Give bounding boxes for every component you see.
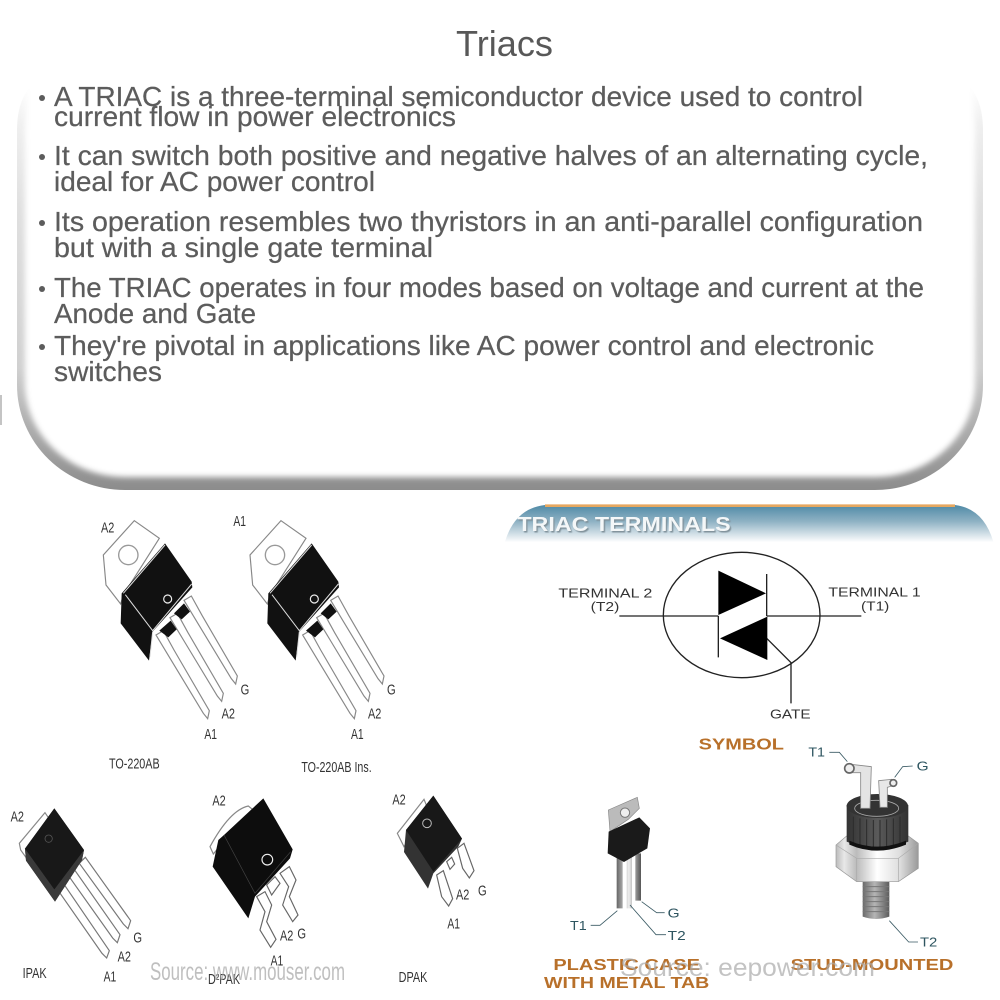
triac symbol — [558, 552, 921, 721]
source credit: eepower: Source: eepower.com — [620, 954, 875, 982]
panel: triac terminals — [505, 505, 993, 992]
icon: D2PAK package: D²PAK — [208, 972, 240, 988]
icon: TO-220AB package: A1 — [204, 727, 217, 743]
bullet 1: A TRIAC is a three-terminal semiconductor device used to control — [54, 81, 863, 112]
bullet 5: switches — [54, 356, 162, 387]
title: Triacs — [456, 23, 553, 64]
bullet list — [39, 81, 928, 387]
header banner: TRIAC TERMINALS — [519, 515, 732, 538]
icon: plastic case triac: T1 — [570, 919, 587, 933]
icon: stud-mounted triac: T2 — [920, 936, 937, 950]
icon: D2PAK package — [208, 793, 306, 988]
panel: text card — [0, 60, 983, 490]
triac symbol: TERMINAL 2 — [558, 585, 652, 600]
icon: TO-220AB Ins. package: A2 — [368, 706, 381, 722]
bullet 4: Anode and Gate — [54, 298, 256, 329]
icon: TO-220AB Ins. package: G — [387, 683, 396, 699]
icon: DPAK package — [392, 793, 487, 986]
icon: stud-mounted triac — [808, 746, 937, 950]
stud-mounted caption: STUD-MOUNTED — [791, 957, 953, 974]
triac symbol: (T1) — [861, 599, 889, 614]
symbol caption: SYMBOL — [699, 737, 784, 754]
icon: plastic case triac: G — [668, 906, 680, 920]
icon: TO-220AB package: TO-220AB — [109, 757, 160, 773]
icon: TO-220AB package: A2 — [222, 706, 235, 722]
icon: IPAK package: A2 — [11, 809, 24, 825]
triac symbol: GATE — [770, 706, 811, 721]
icon: IPAK package: IPAK — [23, 966, 47, 982]
icon: stud-mounted triac: T1 — [808, 746, 825, 760]
icon: D2PAK package: A1 — [271, 953, 283, 969]
icon: TO-220AB Ins. package — [233, 514, 396, 776]
icon: DPAK package: A2 — [456, 887, 469, 903]
icon: DPAK package: A2 — [392, 793, 406, 809]
icon: IPAK package: A1 — [104, 969, 116, 985]
icon: TO-220AB Ins. package: A1 — [233, 514, 246, 530]
icon: stud-mounted triac: G — [917, 760, 929, 774]
bullet 1: current flow in power electronics — [54, 101, 456, 132]
icon: plastic case triac: T2 — [668, 929, 686, 943]
plastic case caption: PLASTIC CASE — [553, 957, 700, 974]
triac symbol: (T2) — [591, 599, 619, 614]
panel: package drawings — [11, 514, 487, 988]
bullet 4 — [39, 272, 924, 329]
bullet 3: Its operation resembles two thyristors in an anti-parallel configuration — [54, 206, 923, 237]
icon: TO-220AB package: G — [241, 683, 249, 699]
icon: TO-220AB package: A2 — [101, 521, 114, 537]
metal tab caption: WITH METAL TAB — [544, 975, 709, 992]
bullet 5: They're pivotal in applications like AC power control and electronic — [54, 330, 874, 361]
bullet 2: It can switch both positive and negative halves of an alternating cycle, — [54, 140, 928, 171]
bullet 3: but with a single gate terminal — [54, 232, 433, 263]
icon: D2PAK package: G — [297, 927, 306, 943]
icon: D2PAK package: A2 — [212, 793, 226, 809]
icon: TO-220AB Ins. package: TO-220AB Ins. — [301, 760, 372, 776]
triac symbol: TERMINAL 1 — [828, 584, 921, 599]
bullet 2: ideal for AC power control — [54, 166, 375, 197]
icon: DPAK package: A1 — [447, 916, 460, 932]
icon: IPAK package — [11, 808, 142, 985]
icon: IPAK package: G — [133, 931, 142, 947]
bullet 1 — [39, 81, 863, 132]
source credit: mouser: Source: www.mouser.com — [150, 958, 345, 986]
header banner — [505, 505, 993, 542]
bullet 2 — [39, 140, 928, 197]
icon: plastic case triac — [570, 797, 686, 943]
icon: D2PAK package: A2 — [280, 929, 293, 945]
bullet 4: The TRIAC operates in four modes based on voltage and current at the — [54, 272, 924, 303]
header banner: TRIAC TERMINALS — [517, 513, 731, 536]
bullet 3 — [39, 206, 923, 263]
bullet 5 — [39, 330, 874, 387]
icon: DPAK package: DPAK — [399, 970, 427, 986]
icon: DPAK package: G — [478, 883, 487, 899]
icon: TO-220AB Ins. package: A1 — [351, 727, 364, 743]
icon: TO-220AB package — [101, 521, 249, 773]
icon: IPAK package: A2 — [118, 950, 131, 966]
